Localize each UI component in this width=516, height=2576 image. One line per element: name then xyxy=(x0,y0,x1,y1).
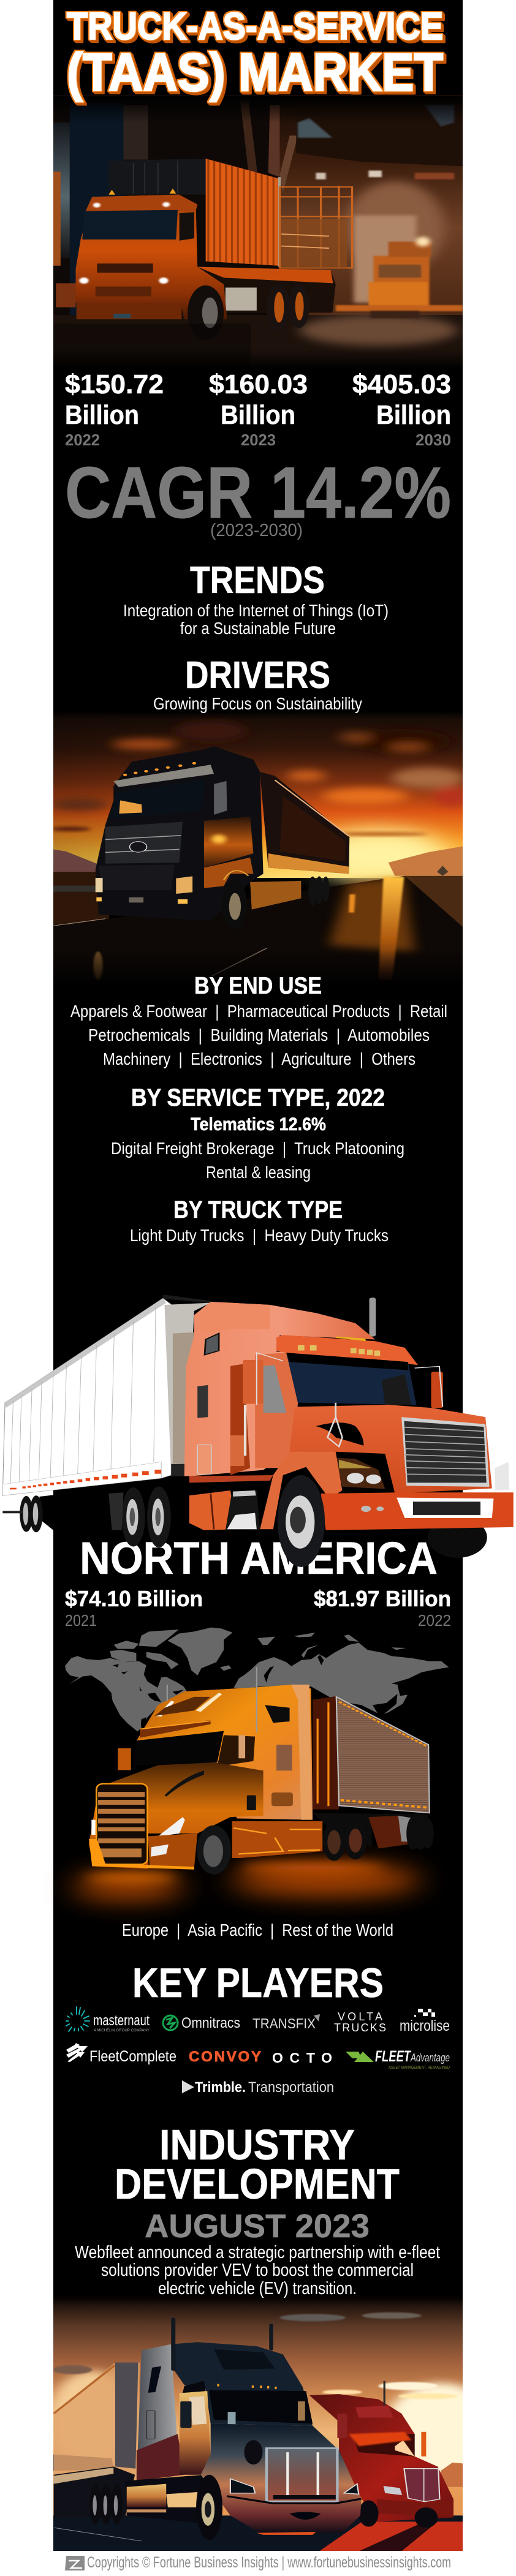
stat: 2030 market size: Billion xyxy=(376,400,451,430)
logo: masternaut: masternaut xyxy=(93,2012,150,2029)
stat: 2030 market size: $405.03 xyxy=(352,369,451,399)
stat: 2022 market size: 2022 xyxy=(65,431,100,449)
date: august 2023: AUGUST 2023 xyxy=(145,2208,370,2245)
logo: octo: OCTO xyxy=(272,2050,332,2066)
heading: drivers: DRIVERS xyxy=(185,654,330,697)
logo: fleet advantage: Advantage xyxy=(410,2052,450,2064)
logo: masternaut: A MICHELIN GROUP COMPANY xyxy=(94,2028,150,2033)
stat: North America 2022 xyxy=(314,1586,451,1630)
logo: fleet advantage xyxy=(346,2048,450,2070)
logo: convoy: CONVOY xyxy=(189,2049,261,2065)
heading: trends: TRENDS xyxy=(190,559,325,602)
stat: North America 2022: $81.97 Billion xyxy=(314,1586,451,1611)
stat: 2023 market size: 2023 xyxy=(241,431,276,449)
heading: by end use: BY END USE xyxy=(194,973,322,999)
text: drivers description: Growing Focus on Sustainability xyxy=(153,694,362,713)
text: end use segments: Machinery | Electronics | Agriculture | Others xyxy=(103,1049,415,1068)
text: end use segments xyxy=(70,1002,447,1068)
text: end use segments: Apparels & Footwear | Pharmaceutical Products | Retail xyxy=(70,1002,447,1021)
logo: fleet advantage: FLEET xyxy=(375,2048,412,2065)
logo: fleetcomplete xyxy=(66,2043,176,2065)
text: development description: solutions provider VEV to boost the commercial xyxy=(101,2261,414,2280)
heading: industry development: INDUSTRY xyxy=(159,2121,355,2169)
CAGR callout: CAGR 14.2% xyxy=(65,452,451,534)
text: trends description: for a Sustainable Future xyxy=(180,619,336,638)
stat: 2023 market size: Billion xyxy=(221,400,295,430)
text: service types xyxy=(111,1139,404,1182)
text: end use segments: Petrochemicals | Building Materials | Automobiles xyxy=(88,1025,430,1044)
text: other regions: Europe | Asia Pacific | Rest of the World xyxy=(122,1921,393,1940)
image: trucks at dusk xyxy=(53,2299,463,2551)
stat: North America 2021: $74.10 Billion xyxy=(65,1586,203,1611)
logo: microlise: microlise xyxy=(400,2017,450,2034)
icon: fortune business insights logo xyxy=(65,2556,85,2570)
text: development description: Webfleet announced a strategic partnership with e-fleet xyxy=(75,2243,440,2262)
logo: microlise xyxy=(400,2009,450,2034)
logo: omnitracs: Omnitracs xyxy=(181,2015,240,2031)
logo: volta trucks xyxy=(334,2011,386,2034)
stat: North America 2022: 2022 xyxy=(418,1611,451,1630)
text: development description: electric vehicle (EV) transition. xyxy=(158,2279,357,2298)
logo: volta trucks: TRUCKS xyxy=(334,2022,386,2034)
image: orange semi truck with white trailer xyxy=(2,1294,514,1567)
image: glowing orange truck xyxy=(72,1667,434,1899)
stat: North America 2021 xyxy=(65,1586,203,1630)
world map xyxy=(65,1628,449,1731)
text: service types: Digital Freight Brokerage | Truck Platooning xyxy=(111,1139,404,1158)
text: service types: Rental & leasing xyxy=(206,1163,311,1182)
logo: fleetcomplete: FleetComplete xyxy=(89,2048,176,2065)
stat: 2030 market size xyxy=(352,369,451,449)
heading: industry development: DEVELOPMENT xyxy=(115,2160,400,2208)
logo: trimble transportation: Trimble. xyxy=(195,2079,246,2096)
logo: omnitracs xyxy=(163,2015,240,2031)
text: trends description xyxy=(123,601,389,638)
stat: 2023 market size xyxy=(209,369,308,449)
logo: masternaut xyxy=(66,2007,150,2033)
stat: 2022 market size: $150.72 xyxy=(65,369,164,399)
logo: fleet advantage: ASSET MANAGEMENT. REIMAGINED xyxy=(389,2066,450,2070)
text: trends description: Integration of the Internet of Things (IoT) xyxy=(123,601,389,620)
stat: 2023 market size: $160.03 xyxy=(209,369,308,399)
stat: 2030 market size: 2030 xyxy=(415,431,451,449)
stat: 2022 market size xyxy=(65,369,164,449)
heading: key players: KEY PLAYERS xyxy=(132,1960,384,2006)
text: development description xyxy=(75,2243,440,2298)
title: TRUCK-AS-A-SERVICE xyxy=(67,6,443,48)
heading: by service type: BY SERVICE TYPE, 2022 xyxy=(131,1084,385,1111)
logo: transfix: TRANSFIX xyxy=(252,2015,316,2031)
logo: trimble transportation: Transportation xyxy=(248,2079,334,2096)
text: truck types: Light Duty Trucks | Heavy Duty Trucks xyxy=(130,1226,389,1245)
text: telematics share: Telematics 12.6% xyxy=(191,1114,326,1135)
stat: 2022 market size: Billion xyxy=(65,400,139,430)
heading: by truck type: BY TRUCK TYPE xyxy=(173,1196,343,1223)
image: dark truck at sunset xyxy=(53,714,463,980)
logo: trimble transportation xyxy=(182,2079,334,2096)
heading: industry development xyxy=(115,2121,400,2208)
image: orange truck at port xyxy=(53,94,463,369)
stat: North America 2021: 2021 xyxy=(65,1611,97,1630)
title: (TAAS) MARKET xyxy=(67,43,443,102)
CAGR callout: (2023-2030) xyxy=(210,521,303,540)
title xyxy=(67,6,443,102)
panel: black background xyxy=(53,0,463,2551)
heading: north america: NORTH AMERICA xyxy=(80,1533,438,1584)
logo: volta trucks: VOLTA xyxy=(338,2011,382,2023)
